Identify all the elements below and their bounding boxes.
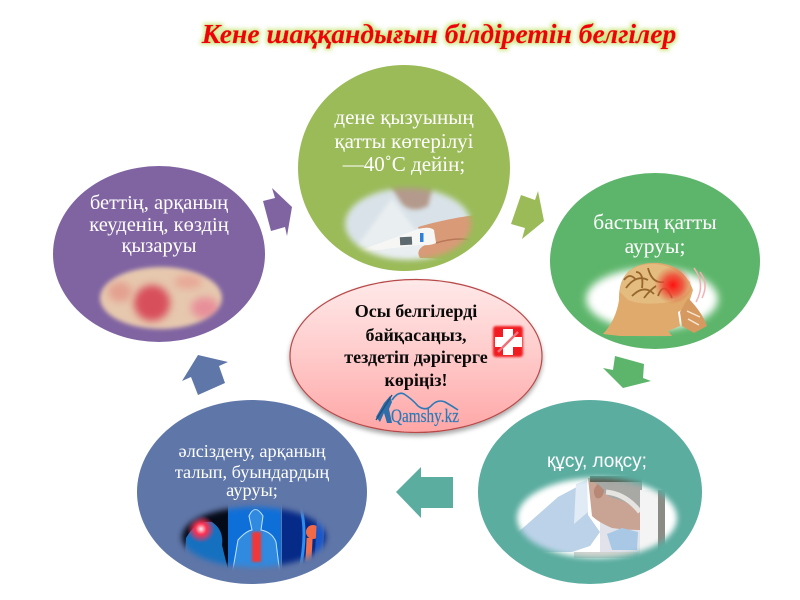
text: see a doctor: көріңіз! bbox=[385, 370, 447, 390]
arrow: weakness to redness bbox=[182, 355, 228, 395]
icon: medical cross bbox=[493, 326, 523, 357]
arrow: redness to fever bbox=[263, 188, 292, 236]
image: skin rash bbox=[95, 262, 227, 334]
image: thermometer bbox=[341, 185, 474, 264]
text: headache: бастың қатты bbox=[593, 210, 717, 234]
panel: high fever bbox=[298, 65, 510, 271]
arrow: vomiting to weakness bbox=[396, 467, 453, 518]
text: weakness: ауруы; bbox=[226, 480, 278, 500]
text: fever: қатты көтерілуі bbox=[334, 129, 474, 153]
title: Кене шаққандығын білдіретін белгілер bbox=[201, 18, 676, 49]
panel: severe headache bbox=[550, 173, 760, 349]
text: see a doctor: тездетіп дәрігерге bbox=[344, 347, 488, 367]
text: see a doctor: Осы белгілерді bbox=[355, 301, 477, 321]
text: see a doctor: байқасаңыз, bbox=[365, 325, 467, 345]
text: fever: дене қызуының bbox=[334, 105, 474, 129]
panel: redness bbox=[53, 166, 265, 342]
logo: Qamshy.kz bbox=[376, 393, 459, 427]
arrow: headache to vomiting bbox=[603, 356, 651, 388]
panel: weakness, back and joint pain bbox=[137, 400, 367, 584]
arrow: fever to headache bbox=[511, 191, 544, 239]
text: vomiting: құсу, лоқсу; bbox=[547, 451, 647, 472]
text: headache: ауруы; bbox=[625, 234, 685, 258]
panel: vomiting, nausea bbox=[478, 400, 702, 584]
text: weakness: әлсіздену, арқаның bbox=[178, 441, 326, 461]
text: weakness: талып, буындардың bbox=[175, 462, 329, 482]
panel: central call to action bbox=[290, 280, 542, 432]
image: head with pain bbox=[586, 263, 718, 336]
text: redness: кеуденің, көздің bbox=[89, 214, 229, 236]
text: redness: қызаруы bbox=[122, 235, 197, 257]
image: nauseous man bbox=[513, 474, 681, 562]
image: painful joints bbox=[178, 504, 330, 570]
text: redness: беттің, арқаның bbox=[90, 192, 228, 214]
text: fever: —40˚С дейін; bbox=[342, 152, 465, 176]
logo: Qamshy.kz: Qamshy.kz bbox=[391, 406, 459, 427]
